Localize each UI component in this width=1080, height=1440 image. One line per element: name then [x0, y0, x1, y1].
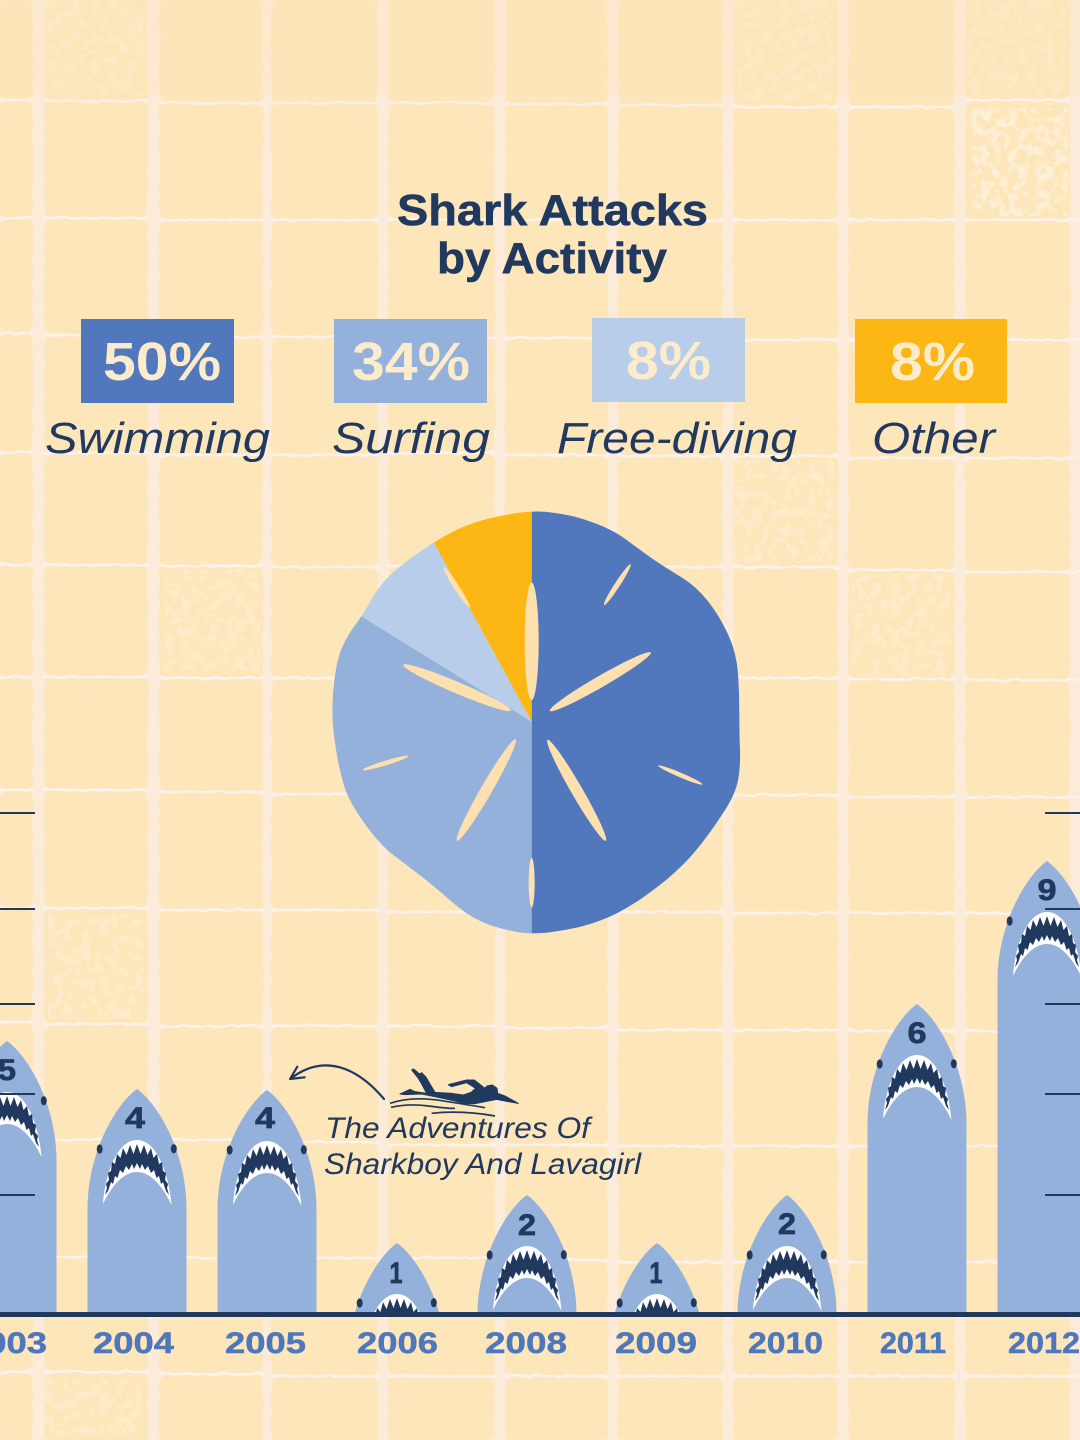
- legend: other 8%: [855, 319, 1007, 463]
- legend: free-diving 8%: 8%: [626, 331, 711, 391]
- year labels: 2010: [748, 1327, 823, 1360]
- legend: surfing 34%: 34%: [352, 332, 470, 392]
- axis ticks: [0, 813, 1080, 1195]
- year labels: 2009: [615, 1327, 697, 1360]
- shark bars: [0, 861, 1080, 1312]
- legend: swimming 50%: 50%: [103, 332, 221, 392]
- values: 4: [125, 1102, 145, 1135]
- caption: film title: [324, 1112, 642, 1181]
- values: 2: [778, 1208, 796, 1241]
- caption: film title: Sharkboy And Lavagirl: [324, 1148, 642, 1181]
- icon: swimmer: [390, 1069, 518, 1116]
- title: [397, 186, 708, 283]
- legend: other 8%: Other: [872, 414, 998, 463]
- year labels: 2008: [485, 1327, 567, 1360]
- year labels: 2004: [93, 1327, 174, 1360]
- pie chart: sand dollar: [332, 512, 740, 934]
- values: 1: [650, 1257, 662, 1290]
- year labels: 2011: [880, 1327, 946, 1360]
- caption: film title: The Adventures Of: [325, 1112, 593, 1145]
- values: 1: [390, 1257, 402, 1290]
- legend: surfing 34%: Surfing: [332, 414, 491, 463]
- values: 4: [255, 1102, 275, 1135]
- legend: free-diving 8%: [557, 318, 798, 463]
- year labels: 2006: [357, 1327, 438, 1360]
- legend: other 8%: 8%: [890, 332, 975, 392]
- legend: surfing 34%: [332, 319, 491, 463]
- values: 6: [908, 1017, 926, 1050]
- shark bar chart: [0, 813, 1080, 1363]
- values: 2: [518, 1209, 536, 1242]
- year labels: [0, 1327, 1080, 1360]
- year labels: 2012: [1008, 1327, 1080, 1360]
- values: 9: [1038, 874, 1056, 907]
- year labels: 2005: [225, 1327, 306, 1360]
- legend: swimming 50%: [45, 319, 271, 463]
- arrow: [290, 1065, 384, 1099]
- legend: free-diving 8%: Free-diving: [557, 414, 798, 463]
- values: [0, 874, 1056, 1290]
- legend: swimming 50%: Swimming: [45, 414, 271, 463]
- title: by Activity: [437, 234, 668, 283]
- baseline: [0, 1312, 1080, 1317]
- title: Shark Attacks: [397, 186, 708, 235]
